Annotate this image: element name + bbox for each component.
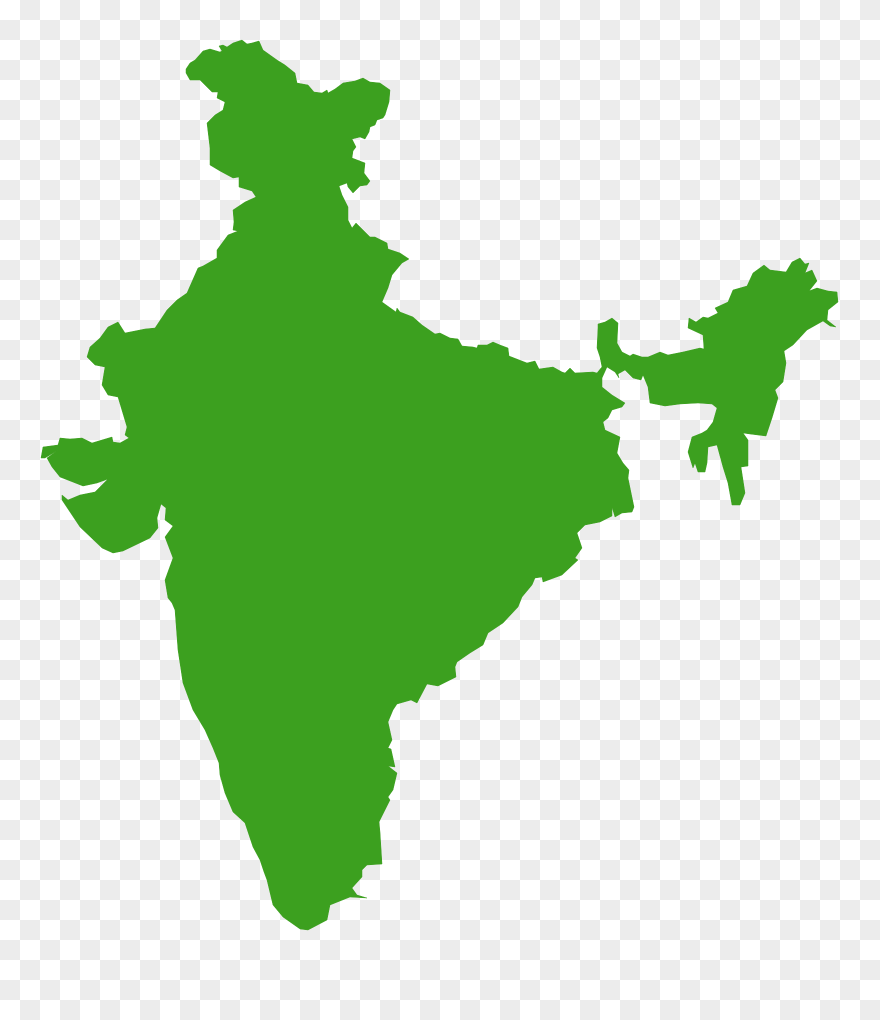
map: India silhouette: [41, 40, 838, 930]
